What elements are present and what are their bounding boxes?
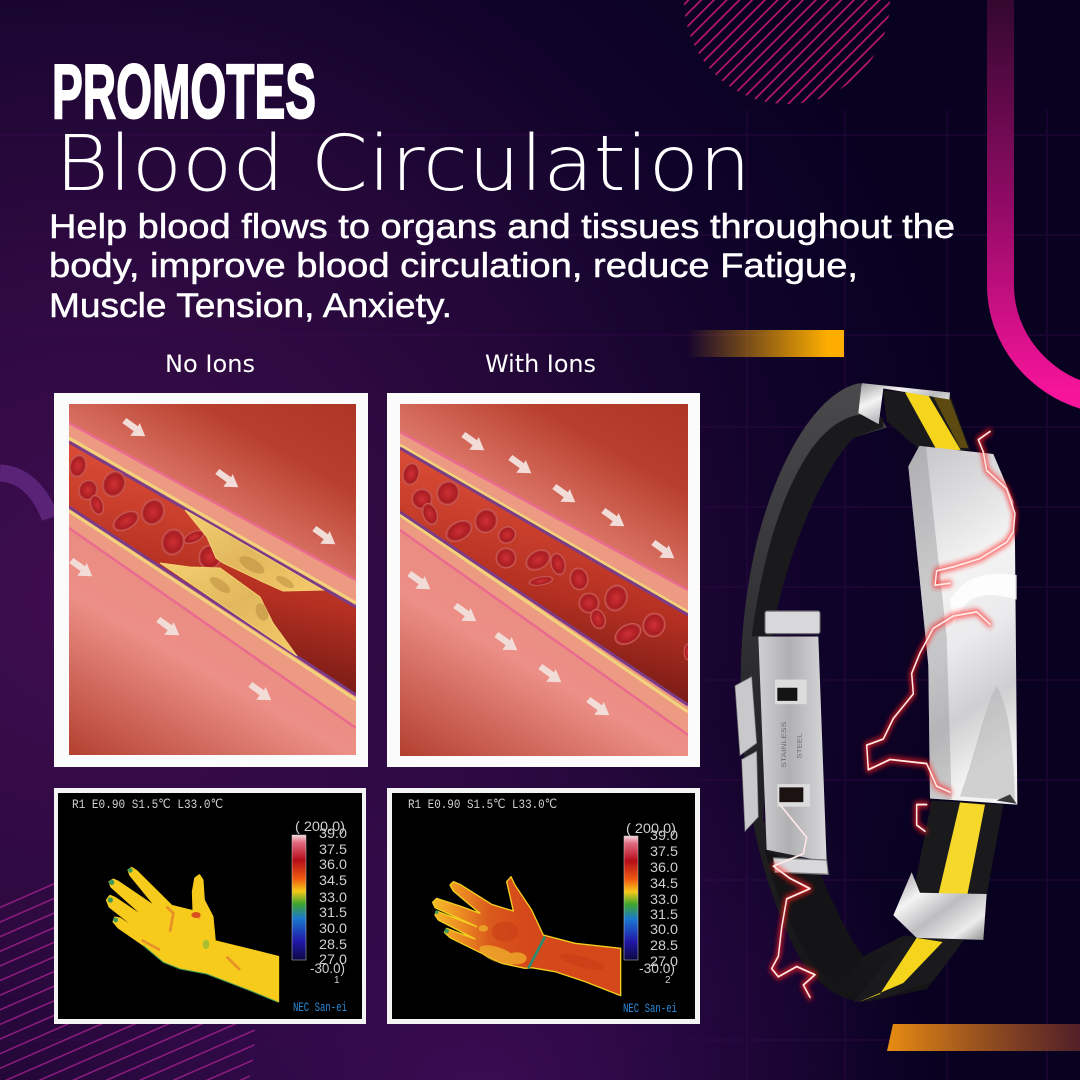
scale labels: 39.0 bbox=[650, 828, 678, 843]
brand text: NEC San-ei bbox=[293, 1000, 347, 1015]
scale labels: 33.0 bbox=[650, 892, 678, 907]
plaque mottling bbox=[210, 556, 294, 621]
scale labels: 31.5 bbox=[650, 907, 678, 922]
rubber band back bbox=[741, 383, 963, 1002]
decorative hatched circle bbox=[684, 0, 890, 104]
label: no ions: No Ions bbox=[165, 350, 255, 378]
hand bbox=[107, 868, 278, 1002]
scale labels: -30.0) bbox=[639, 961, 675, 976]
bottom keeper bbox=[893, 872, 987, 940]
wristband bbox=[528, 937, 545, 968]
description text: body, improve blood circulation, reduce Fatigue, bbox=[49, 247, 858, 285]
color scale bbox=[624, 836, 638, 960]
clasp engraving: STAINLESS bbox=[780, 722, 788, 768]
scale labels: -30.0) bbox=[310, 961, 345, 976]
description text bbox=[49, 208, 955, 325]
panel: thermal image, with ions bbox=[387, 788, 700, 1024]
panel: clear artery, with ions bbox=[387, 393, 700, 767]
scale labels: ( 200.0) bbox=[626, 821, 676, 836]
scale labels: 27.0 bbox=[650, 954, 678, 969]
scale labels: 36.0 bbox=[650, 860, 678, 875]
product: bracelet bbox=[735, 383, 1017, 1002]
brand text: NEC San-ei bbox=[623, 1001, 677, 1016]
scale labels: 34.5 bbox=[319, 873, 347, 888]
scale labels: 33.0 bbox=[319, 890, 347, 905]
decorative hatching bottom left bbox=[0, 870, 255, 1080]
hand bbox=[433, 877, 621, 996]
metal plate bbox=[908, 446, 1017, 805]
decorative orange bar bottom right bbox=[887, 1024, 1080, 1051]
lower band with yellow stripe bbox=[853, 800, 1003, 1002]
title: promotes: PROMOTES bbox=[52, 49, 316, 135]
title: blood circulation: Blood Circulation bbox=[55, 120, 751, 209]
decorative purple arc bbox=[0, 473, 50, 518]
scale labels: 28.5 bbox=[319, 937, 347, 952]
description text: Muscle Tension, Anxiety. bbox=[49, 287, 452, 325]
scale labels: 37.5 bbox=[319, 842, 347, 857]
blood cells bbox=[67, 453, 224, 572]
scale labels bbox=[626, 821, 678, 986]
scale labels: 39.0 bbox=[319, 826, 347, 841]
blood cells bbox=[400, 461, 692, 660]
scale labels: 30.0 bbox=[650, 922, 678, 937]
label: with ions: With Ions bbox=[485, 350, 596, 378]
top band with yellow stripe bbox=[883, 390, 970, 450]
rubber inner surface bbox=[752, 414, 883, 636]
scale labels: 2 bbox=[665, 975, 671, 986]
lightning sparks bbox=[772, 432, 1015, 997]
arrows bbox=[69, 418, 335, 700]
decorative orange bar bbox=[687, 330, 844, 357]
top keeper bbox=[858, 383, 950, 424]
clasp bbox=[735, 611, 828, 874]
clasp engraving: STEEL bbox=[795, 733, 803, 759]
thermal header text: R1 E0.90 S1.5℃ L33.0℃ bbox=[72, 797, 223, 812]
scale labels: 1 bbox=[334, 975, 340, 986]
arrows bbox=[407, 432, 674, 715]
scale labels: 27.0 bbox=[319, 952, 347, 967]
scale labels: 34.5 bbox=[650, 876, 678, 891]
plaque deposits bbox=[160, 510, 323, 656]
scale labels: 31.5 bbox=[319, 905, 347, 920]
description text: Help blood flows to organs and tissues throughout the bbox=[49, 208, 955, 246]
scale labels: 28.5 bbox=[650, 938, 678, 953]
clasp engraving bbox=[780, 722, 803, 768]
color scale bbox=[292, 835, 306, 960]
scale labels: 37.5 bbox=[650, 844, 678, 859]
scale labels: ( 200.0) bbox=[295, 819, 345, 834]
decorative pink curved bar bbox=[1000, 0, 1080, 396]
thermal header text: R1 E0.90 S1.5℃ L33.0℃ bbox=[408, 797, 557, 812]
panel: artery with plaque, no ions bbox=[54, 393, 368, 767]
scale labels: 30.0 bbox=[319, 921, 347, 936]
scale labels bbox=[295, 819, 347, 986]
scale labels: 36.0 bbox=[319, 857, 347, 872]
panel: thermal image, no ions bbox=[54, 788, 366, 1024]
